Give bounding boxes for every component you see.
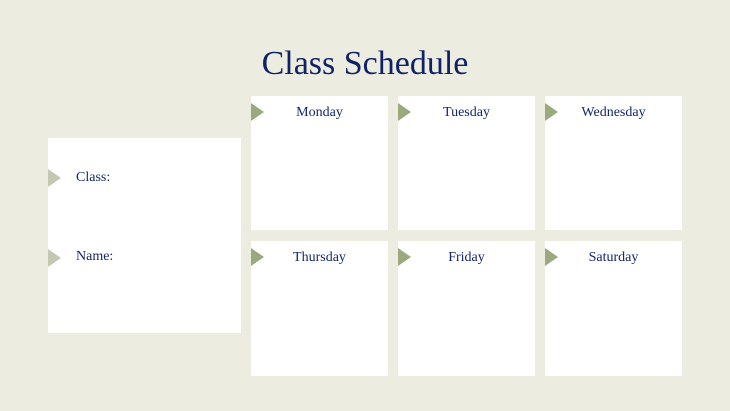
panel: Saturday: Saturday — [589, 250, 638, 265]
panel: Wednesday: Wednesday — [581, 105, 646, 120]
label: class: Class: — [76, 170, 110, 185]
panel: Tuesday: Tuesday — [443, 105, 490, 120]
panel: Wednesday — [545, 96, 682, 230]
panel: Thursday — [251, 241, 388, 376]
panel: Tuesday — [398, 96, 535, 230]
panel: Monday — [251, 96, 388, 230]
title: Class Schedule — [262, 45, 468, 82]
panel: class info — [48, 138, 241, 333]
label: name: Name: — [76, 249, 113, 264]
panel: Monday: Monday — [296, 105, 343, 120]
panel: Saturday — [545, 241, 682, 376]
panel: Friday — [398, 241, 535, 376]
panel: Friday: Friday — [448, 250, 485, 265]
icon: class triangle — [48, 169, 61, 187]
icon: name triangle — [48, 249, 61, 267]
panel: Thursday: Thursday — [293, 250, 346, 265]
